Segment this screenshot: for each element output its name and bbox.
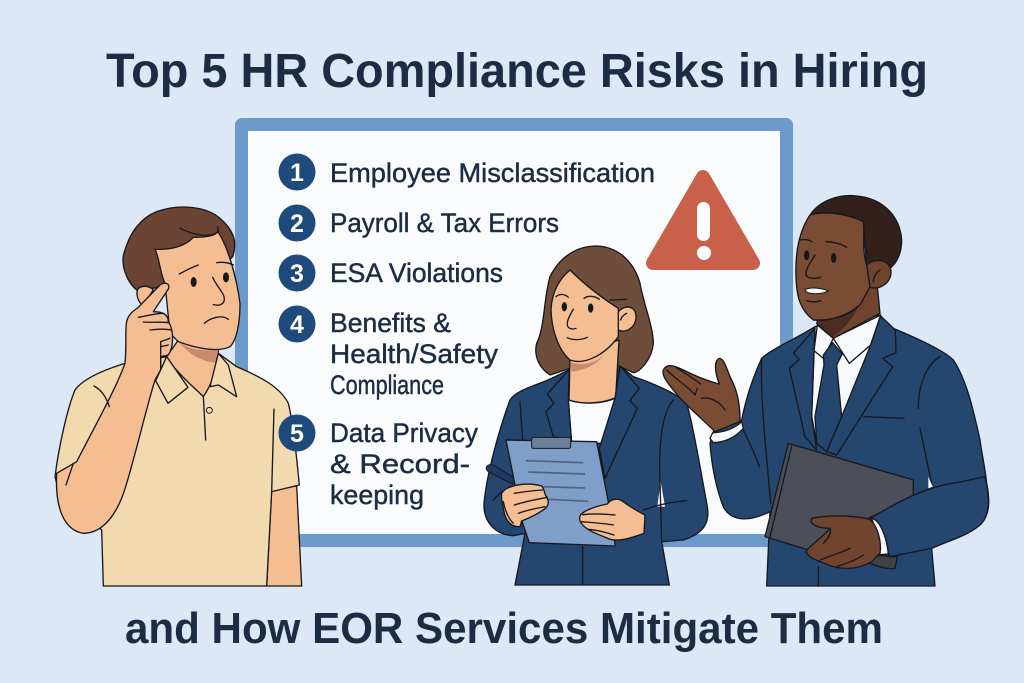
cuff [710, 422, 743, 443]
item 3 [278, 254, 503, 292]
far arm [267, 486, 302, 586]
neck shadow [571, 355, 604, 372]
item 5: & Record- [330, 449, 470, 479]
clipboard [506, 437, 615, 546]
neck shadow [179, 343, 218, 363]
raised hand [663, 358, 740, 432]
palm lines [667, 367, 725, 410]
hair [123, 207, 235, 290]
item 3: ESA Violations [330, 258, 503, 288]
hair [536, 246, 653, 375]
hair fringe [180, 227, 218, 235]
gap [657, 482, 665, 507]
title: Top 5 HR Compliance Risks in Hiring [106, 45, 928, 98]
pen [486, 465, 515, 484]
item 2: Payroll & Tax Errors [330, 208, 559, 238]
subtitle: and How EOR Services Mitigate Them [125, 604, 883, 653]
jacket [484, 366, 708, 585]
collar [156, 357, 188, 403]
neck shadow [818, 307, 858, 337]
face [551, 270, 618, 361]
facial features [801, 240, 880, 302]
item 4: Compliance [330, 370, 444, 400]
neck [167, 337, 218, 397]
item 5 [278, 414, 478, 510]
item 2 [278, 204, 559, 242]
jacket centre line [816, 567, 820, 586]
jacket seams [493, 400, 687, 585]
button [206, 407, 212, 413]
list: compliance risks [278, 154, 655, 510]
shirt [55, 353, 299, 586]
item 4: Benefits & [330, 308, 451, 338]
neck [817, 280, 880, 338]
item 4: Health/Safety [330, 339, 499, 369]
icon: warning triangle [653, 177, 753, 263]
item 1: Employee Misclassification [330, 158, 655, 188]
jacket [710, 318, 989, 586]
folder back edge [865, 555, 897, 569]
lapel right [827, 316, 896, 455]
collar [814, 325, 833, 358]
figure: woman with clipboard [484, 246, 708, 585]
item 1: 1 [290, 159, 304, 187]
white cuff [872, 518, 888, 555]
placket and seams [66, 386, 274, 492]
figure: man in suit [663, 196, 989, 586]
folder [765, 443, 913, 549]
item 5: Data Privacy [330, 418, 478, 448]
tie [815, 343, 842, 452]
jaw line [813, 307, 857, 320]
eyebrows, eyes, nose and mouth [179, 262, 233, 323]
right hand [580, 499, 645, 540]
holding hand [806, 516, 880, 568]
panel: whiteboard [235, 118, 793, 547]
collar right [210, 353, 237, 397]
shirt [812, 315, 881, 447]
neck [569, 340, 619, 403]
folder spine [770, 446, 792, 537]
item 5: 5 [290, 420, 304, 448]
gap by waist [928, 477, 933, 488]
white top [568, 398, 615, 443]
lapels [546, 369, 572, 443]
lapel left [789, 328, 817, 450]
item 5: keeping [330, 480, 424, 510]
ear [618, 307, 636, 331]
finger lines [138, 313, 171, 370]
item 4: 4 [290, 311, 304, 339]
item 2: 2 [290, 210, 304, 238]
lapel right [599, 366, 639, 478]
sleeve forearm [870, 477, 988, 557]
facial features [556, 294, 627, 340]
collar right [833, 315, 881, 363]
item 4 [278, 306, 499, 400]
hair [810, 196, 902, 268]
left hand [501, 484, 548, 527]
item 1 [278, 154, 655, 190]
face [796, 213, 870, 320]
item 3: 3 [290, 260, 304, 288]
hand finger lines [820, 528, 863, 567]
left hand fingers [503, 490, 547, 523]
figure: worried man [55, 207, 302, 586]
ear [867, 260, 891, 288]
ear [137, 286, 153, 305]
near arm and hand [56, 283, 173, 533]
right hand fingers [582, 514, 615, 535]
suit seams [740, 356, 941, 503]
face [155, 232, 240, 349]
